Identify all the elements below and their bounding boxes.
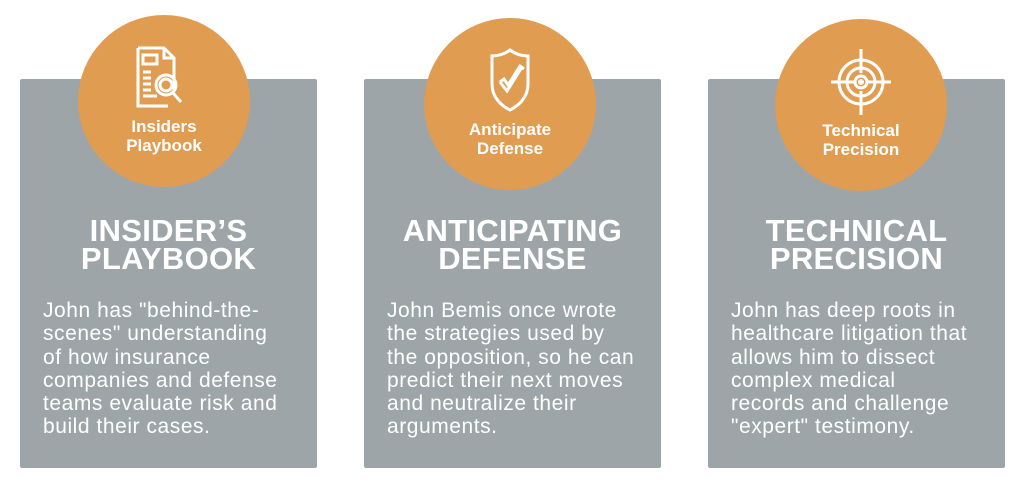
panel: anticipating defense xyxy=(364,79,661,468)
body text: insider's playbook: of how insurance xyxy=(43,346,211,369)
heading: insider's playbook xyxy=(81,213,256,276)
label: Insiders Playbook xyxy=(126,117,202,155)
body text: insider's playbook: teams evaluate risk and xyxy=(43,392,277,415)
heading: insider's playbook: PLAYBOOK xyxy=(81,241,256,276)
body text: technical precision: John has deep roots in xyxy=(731,299,956,322)
label: Insiders Playbook: Playbook xyxy=(126,136,202,155)
label: Insiders Playbook: Insiders xyxy=(131,117,197,136)
heading: anticipating defense xyxy=(403,213,622,276)
body text: technical precision: healthcare litigation that xyxy=(731,322,967,345)
label: Anticipate Defense: Anticipate xyxy=(469,120,551,139)
heading: anticipating defense: DEFENSE xyxy=(438,241,587,276)
icon: shield with check xyxy=(490,48,530,112)
icon: document with magnifier xyxy=(136,46,182,108)
body text: anticipating defense: the strategies used by xyxy=(387,322,605,345)
body text: insider's playbook: John has "behind-the- xyxy=(43,299,259,322)
body text: insider's playbook: companies and defense xyxy=(43,369,278,392)
circle badge: technical precision xyxy=(775,19,947,191)
panel: insider's playbook xyxy=(20,79,317,468)
label: Technical Precision: Technical xyxy=(822,121,900,140)
body text: anticipating defense: and neutralize their xyxy=(387,392,577,415)
label: Technical Precision xyxy=(822,121,900,159)
circle badge: anticipate defense xyxy=(424,18,596,190)
body text: technical precision: allows him to dissect xyxy=(731,346,935,369)
body text: insider's playbook xyxy=(43,299,278,438)
body text: technical precision xyxy=(731,299,967,438)
body text: technical precision: records and challenge xyxy=(731,392,949,415)
label: Anticipate Defense: Defense xyxy=(477,139,543,158)
label: Anticipate Defense xyxy=(469,120,551,158)
heading: technical precision: PRECISION xyxy=(770,241,943,276)
heading: technical precision xyxy=(766,213,947,276)
heading: technical precision: TECHNICAL xyxy=(766,213,947,248)
label: Technical Precision: Precision xyxy=(823,140,899,159)
body text: insider's playbook: scenes" understanding xyxy=(43,322,267,345)
panel: technical precision xyxy=(708,79,1005,468)
heading: insider's playbook: INSIDER’S xyxy=(90,213,247,248)
body text: insider's playbook: build their cases. xyxy=(43,415,210,438)
icon: crosshair target xyxy=(831,49,891,115)
body text: anticipating defense: predict their next moves xyxy=(387,369,623,392)
circle badge: insiders playbook xyxy=(78,15,250,187)
body text: anticipating defense: the opposition, so he can xyxy=(387,346,634,369)
body text: anticipating defense: John Bemis once wrote xyxy=(387,299,617,322)
body text: technical precision: "expert" testimony. xyxy=(731,415,915,438)
body text: technical precision: complex medical xyxy=(731,369,896,392)
heading: anticipating defense: ANTICIPATING xyxy=(403,213,622,248)
body text: anticipating defense: arguments. xyxy=(387,415,498,438)
body text: anticipating defense xyxy=(387,299,634,438)
